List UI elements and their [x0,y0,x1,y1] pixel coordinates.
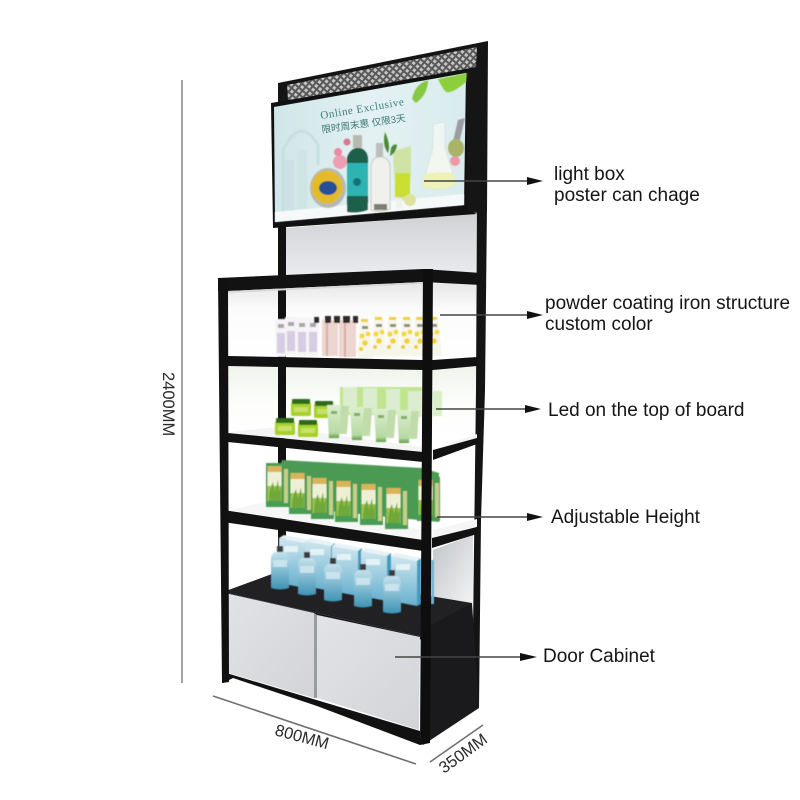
header frame with mesh strip [278,41,488,226]
shelf tier 1 [228,356,477,370]
rear left post [278,222,286,572]
left cabinet door [225,593,314,698]
arrow: door cabinet [395,653,537,661]
height dimension line [181,80,183,683]
label: led: Led on the top of board [548,400,744,421]
lit back wall: tier 4 side [433,535,473,605]
label: door cabinet: Door Cabinet [543,646,656,667]
label: adjustable height: Adjustable Height [551,507,701,528]
front right post [420,269,433,745]
cabinet side [423,603,479,745]
lit back wall: tier 1 [228,282,476,360]
door divider [314,613,317,698]
shelf tier 2 [228,433,477,462]
back panel [286,213,477,282]
arrow: led [436,405,541,413]
shelf tier 4 products [271,535,434,614]
lit back wall: tier 2 [228,364,476,440]
front left post [218,278,229,683]
label: iron structure: powder coating iron structure [545,293,790,314]
light box [271,70,477,228]
shelf tier 3 [223,510,477,551]
right cabinet door [317,615,420,730]
shelf tier 2 products [275,387,442,443]
shelf tier 2 surface [230,427,477,452]
shelf tier 3 surface [230,499,477,540]
height label: 2400MM [159,372,177,436]
poster subhead: 限时周末惠 仅限3天 [321,112,407,136]
width label: 800MM [273,721,331,753]
depth label: 350MM [436,730,491,777]
label: light box: light box [554,164,625,185]
arrow: adjustable height [437,513,543,521]
depth dimension line [430,725,483,762]
cabinet front lip [223,592,423,640]
arrow: iron structure [440,311,543,319]
label: light box: poster can chage [554,185,700,206]
display shelf unit [218,41,488,745]
width dimension line [213,696,416,764]
shelf tier 1 products [275,316,442,358]
cabinet plinth [223,672,420,745]
right rear post [472,205,487,710]
top frame [218,269,481,293]
arrow: light box [424,177,543,185]
label: iron structure: custom color [545,314,653,335]
shelf tier 3 products [266,460,440,529]
poster scenery [275,73,467,222]
cabinet top surface [223,571,472,637]
poster headline: Online Exclusive [320,96,405,122]
